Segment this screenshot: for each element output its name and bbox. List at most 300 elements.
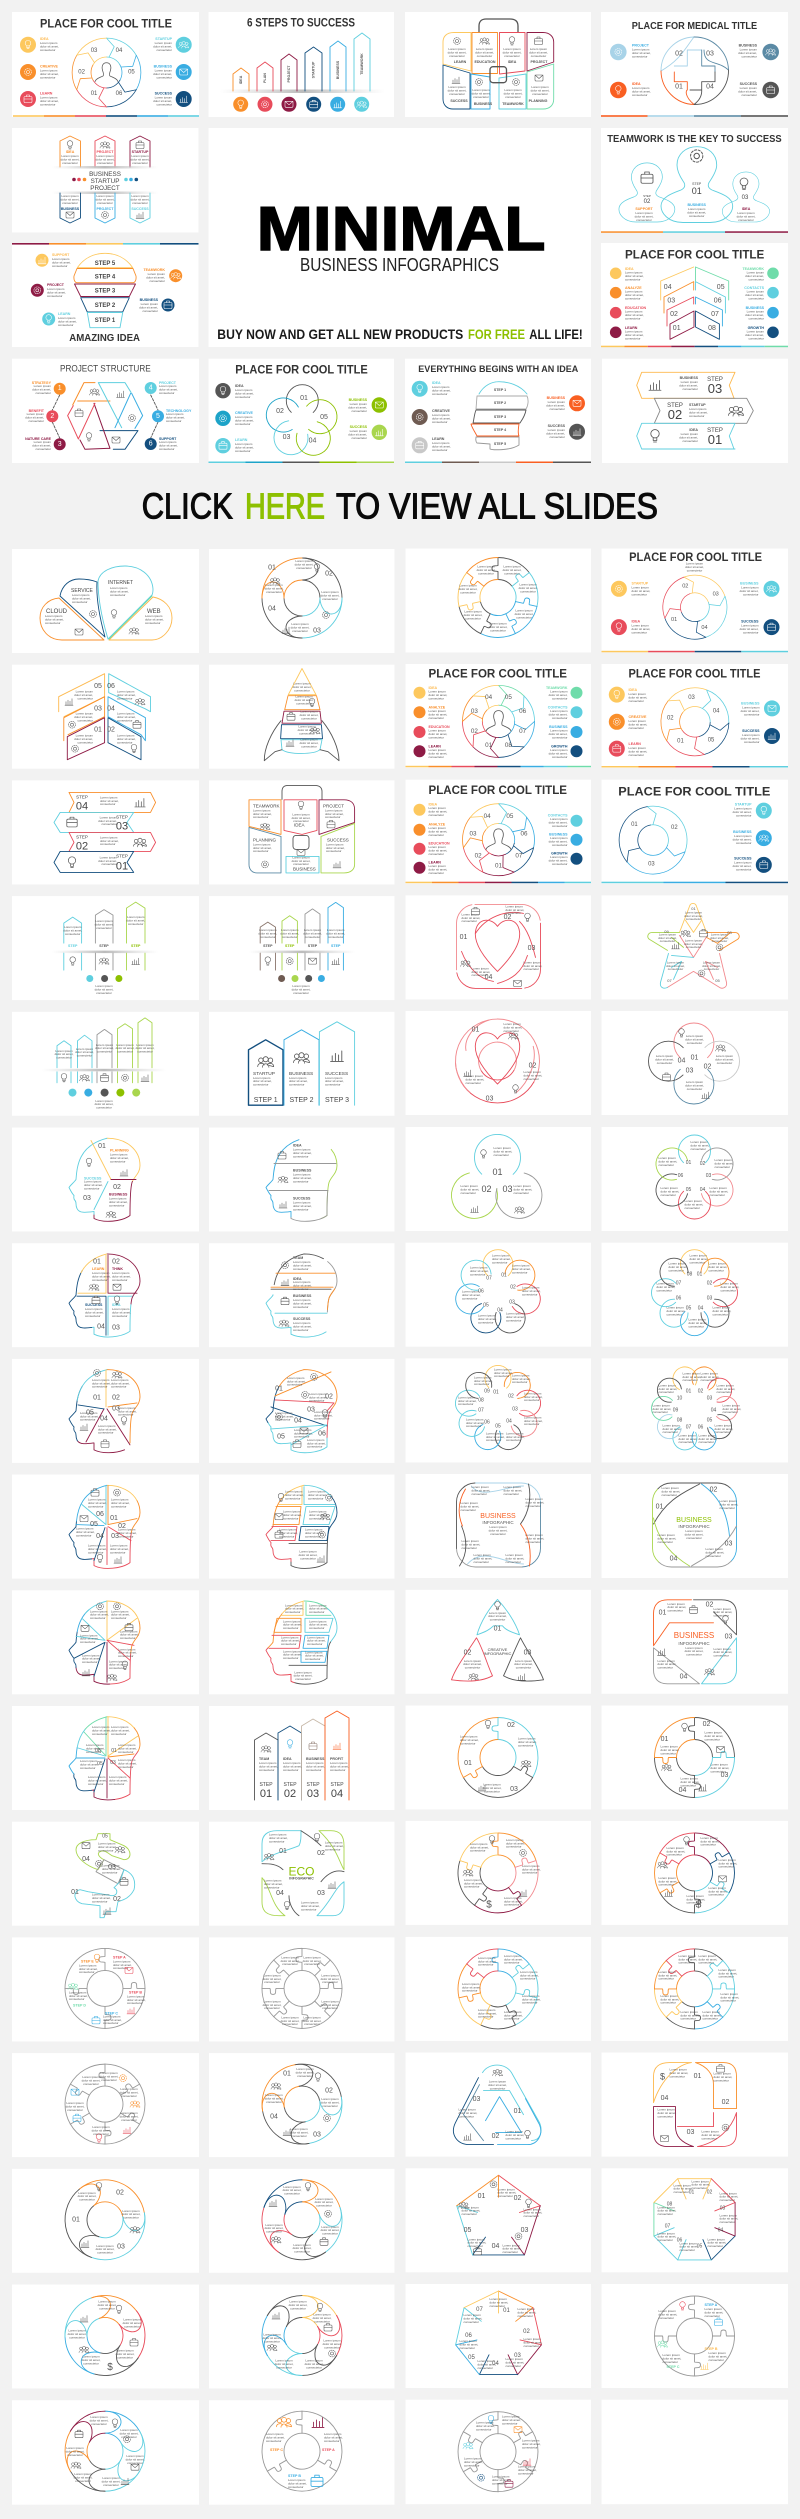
slide: place for cool title, eight part ring with person: 01 (485, 742, 493, 749)
slide: place for cool title, chevrons (601, 243, 788, 347)
ring chart with person (62, 30, 151, 115)
slide: four houses: IDEA (283, 1757, 292, 1761)
heading: click here to view all slides: TO VIEW ALL SLIDES (336, 486, 658, 526)
chevron stack: 07 (711, 311, 719, 318)
slide: briefcase infographic: PLANNING (529, 99, 548, 103)
slide: seven circles: 06 (478, 1289, 484, 1295)
slide: briefcase infographic: LEARN (454, 60, 467, 64)
numbered nodes: 2 (50, 413, 54, 420)
arrow bars: TEAMWORK (360, 53, 364, 75)
three people outlines: BUSINESS (688, 203, 706, 207)
slide: rounded square business infographic: INFOGRAPHIC (678, 1524, 710, 1529)
slide: place for cool title, five part ring: 03 (688, 695, 695, 701)
slide: nine circles: 06 (484, 1419, 490, 1425)
icons and side labels: IDEA (432, 381, 441, 385)
chevron stack: 05 (717, 284, 725, 291)
slide: head with eight wedges (12, 1706, 199, 1810)
slide: nine circles (406, 1358, 591, 1462)
slide: place for cool title, five part ring: IDEA (628, 688, 637, 692)
slide: five part swirl ring (209, 2169, 394, 2274)
numbered nodes: PROJECT (159, 381, 177, 385)
slide: nine circles: 02 (508, 1393, 514, 1399)
heading: PLACE FOR MEDICAL TITLE (632, 20, 757, 32)
chevron stack: 02 (670, 311, 678, 318)
slide: numeral ring, four steps: STEP E (81, 1959, 94, 1963)
bulb steps: STEP 5 (95, 261, 116, 267)
slide: place for cool title, five part ring: 04 (713, 709, 720, 715)
arrow bars: IDEA (239, 75, 243, 84)
slide: rounded square business infographic, four parts: 02 (706, 1601, 713, 1608)
slide: eight circles: 04 (698, 1306, 703, 1312)
slide: head with six wedges: 02 (118, 1523, 126, 1530)
icons and side labels: CREATIVE (40, 64, 59, 68)
slide: six part briefcase: TEAMWORK (253, 803, 280, 808)
slide: place for cool title, eight part ring with person: LEARN (428, 744, 441, 748)
slide: three circles: 01 (492, 1167, 503, 1177)
icons and side labels: CONTACTS (744, 286, 765, 290)
slide: head with three wedges: 02 (113, 1184, 121, 1191)
upper tags: STARTUP (132, 150, 149, 154)
slide: three blade triangle: 02 (464, 1649, 471, 1656)
slide: cloud with four parts (12, 549, 199, 653)
slide: three step ribbons: BUSINESS (680, 376, 699, 380)
ring chart with person: 05 (128, 70, 135, 75)
slide: place for cool title, five circles (208, 359, 394, 471)
slide: place for cool title, four part ring: 04 (701, 625, 708, 631)
slide: head with six cuts (209, 1359, 394, 1463)
slide: head with six cuts: 02 (325, 1393, 333, 1400)
three people outlines: IDEA (742, 207, 751, 211)
slide: place for cool title, three part ring: STARTUP (735, 803, 752, 807)
chevron stack: 08 (708, 325, 716, 332)
icons and side labels (215, 383, 387, 453)
slide: four part swirl ring, large text: 03 (313, 2132, 321, 2139)
slide: three blade triangle: 03 (524, 1649, 531, 1656)
icons and side labels: LEARN (235, 438, 248, 442)
slide: three houses: STARTUP (253, 1071, 275, 1077)
slide: heart ring (406, 1011, 591, 1118)
ring chart with person: 02 (78, 70, 86, 75)
slide: rounded square, four quarter arcs: 02 (722, 2099, 729, 2106)
slide: six chevron houses: 06 (107, 683, 115, 690)
bulb steps (74, 253, 136, 328)
slide: octagon, eight parts: 02 (707, 2189, 712, 2195)
slide: pentagon, five parts: 01 (478, 2193, 485, 2200)
slide: head with four layers: BUSINESS (293, 1294, 312, 1298)
slide: rounded square business infographic, four parts (602, 1590, 788, 1694)
heading: PLACE FOR COOL TITLE (235, 365, 368, 377)
slide: three step ribbons: 03 (708, 381, 722, 396)
slide: star: 01 (691, 906, 696, 911)
slide: six chevron houses: 02 (107, 727, 115, 734)
slide: six part briefcase (209, 780, 394, 884)
slide: head in four quadrants (12, 1243, 199, 1347)
slide: rounded square, four quarter arcs: 04 (661, 2095, 668, 2102)
slide: rounded square, four quarter arcs: $ (660, 2072, 665, 2082)
slide: three step arrows: STEP (68, 944, 78, 948)
slide: octagon, eight parts (602, 2168, 788, 2272)
slide: three step arrows: STEP (131, 944, 141, 948)
overlapping circles: 05 (320, 414, 328, 421)
slide: rounded square, four quarter arcs: 03 (687, 2129, 694, 2136)
slide: six circles: 03 (706, 1173, 711, 1179)
slide: ten circles: 03 (707, 1395, 712, 1401)
slide: octagon, eight parts: 07 (665, 2223, 670, 2229)
chevron stack: 04 (664, 284, 672, 291)
slide: head with three wedges: 01 (98, 1143, 106, 1150)
slide: four houses: TEAM (259, 1757, 269, 1761)
slide: six part briefcase: SUCCESS (327, 837, 349, 842)
subtitle: BUSINESS INFOGRAPHICS (300, 255, 499, 275)
slide: business startup project (12, 128, 198, 232)
ring chart with person: 03 (91, 48, 98, 54)
lower tags (60, 193, 150, 223)
slide: three houses: BUSINESS (289, 1071, 313, 1077)
slide: eight circles (602, 1243, 788, 1347)
slide: nine circles: 09 (484, 1388, 490, 1394)
slide: six chevron houses: 03 (94, 706, 102, 713)
icons and side labels: PROJECT (632, 44, 650, 48)
slide: place for cool title, seven part ring: 01 (495, 862, 502, 869)
slide: heptagon, seven parts: 07 (476, 2307, 483, 2313)
slide: three blade triangle: CREATIVE (488, 1647, 508, 1652)
slide: four houses (209, 1706, 394, 1810)
slide: eight circles: 02 (707, 1281, 712, 1287)
slide: rounded square business infographic: 02 (710, 1486, 717, 1494)
slide: place for cool title, four part ring: 01 (671, 617, 677, 623)
slide: five part swirl ring, colour variant (12, 2284, 199, 2389)
slide: four step ribbons: STEP (116, 853, 128, 858)
slide: teamwork is the key to success (601, 128, 788, 233)
slide: rounded square business infographic with swirls (406, 1474, 591, 1578)
icons and side labels: ANALYZE (625, 286, 642, 290)
numbered nodes: 6 (149, 440, 153, 448)
slide: head with five wedges (12, 1359, 199, 1463)
slide: four houses: STEP (330, 1782, 344, 1788)
slide: pentagon, five parts: 02 (514, 2195, 521, 2202)
icons and side labels: SUCCESS (350, 425, 368, 429)
slide: dollar sign puzzle: 03 (108, 1864, 116, 1871)
slide: place for cool title, three part ring: BUSINESS (733, 830, 752, 834)
icons and side labels: BUSINESS (746, 306, 765, 310)
slide: numeral ring, four steps: STEP A (113, 1955, 126, 1959)
slide: heptagon, seven parts (406, 2284, 591, 2388)
slide: rounded triangle, three parts: 02 (492, 2133, 499, 2140)
slide: eight circles: 06 (676, 1296, 681, 1302)
icons and side labels: GROWTH (748, 326, 764, 330)
slide: rocket (209, 665, 394, 769)
overlapping circles: 04 (309, 438, 316, 444)
slide: cloud with four parts: CLOUD (46, 609, 68, 615)
slide: three step ribbons: STARTUP (689, 403, 706, 407)
slide: seven circles: 01 (501, 1273, 507, 1279)
slide: four step arrows: STEP (331, 944, 341, 948)
slide: ten circles: 05 (707, 1417, 712, 1423)
slide: six circles: 04 (700, 1187, 705, 1193)
heading: PLACE FOR COOL TITLE (40, 18, 172, 30)
slide: place for cool title, eight part ring with person: 04 (485, 694, 493, 701)
numbered nodes: BENEFIT (29, 409, 45, 413)
slide: rounded square business infographic, four parts: INFOGRAPHIC (678, 1641, 710, 1646)
slide: four step ribbons: 01 (116, 860, 128, 872)
slide: numeral ring, six steps (12, 2053, 199, 2157)
slide: rounded square business infographic, four parts: BUSINESS (674, 1631, 714, 1640)
slide: place for cool title, six step ring (12, 12, 199, 117)
slide: briefcase infographic: PROJECT (531, 60, 548, 64)
slide: six piece puzzle ring (602, 1821, 788, 1925)
slide: seven circles: 07 (486, 1276, 492, 1282)
slide: four part swirl ring (209, 549, 394, 653)
slide: place for cool title, five part ring: 01 (677, 738, 684, 744)
slide: heptagon, seven parts: 04 (492, 2361, 499, 2367)
numbered nodes (25, 381, 192, 451)
icons and side labels: LEARN (432, 437, 445, 441)
numbered nodes: NATURE CARE (25, 437, 52, 441)
heading: EVERYTHING BEGINS WITH AN IDEA (418, 364, 578, 375)
slide: four step arrows: STEP (285, 944, 295, 948)
slide: head with six cuts: 03 (307, 1406, 315, 1413)
slide: four circles: 02 (704, 1064, 711, 1070)
slide: dollar sign puzzle: 05 (102, 1834, 108, 1840)
slide: five piece puzzle ring: $ (486, 1899, 492, 1910)
slide: head with four layers: SUCCESS (293, 1317, 311, 1321)
slide: numeral ring, eight steps (209, 1937, 394, 2041)
slide: briefcase infographic (405, 12, 591, 117)
slide: rounded square business infographic, four parts: 04 (680, 1673, 687, 1680)
circle with medical cross: 02 (675, 50, 683, 58)
icons and side labels: SUCCESS (155, 92, 173, 96)
slide: rounded square business infographic, four parts: 01 (659, 1609, 666, 1616)
icons and side labels (31, 253, 182, 327)
slide: place for cool title, eight part ring with person: ANALYZE (428, 706, 446, 710)
slide: place for cool title, three part ring (602, 780, 788, 884)
colour strip (601, 231, 788, 233)
slide: rounded triangle, three parts: 03 (473, 2096, 480, 2103)
three people outlines: 02 (644, 199, 651, 205)
arrow bars: PLAN (263, 73, 267, 83)
slide: briefcase infographic: EDUCATION (474, 60, 496, 64)
slide: head with four layers (209, 1243, 394, 1347)
icons and side labels: IDEA (632, 82, 641, 86)
slide: briefcase infographic: SUCCESS (450, 99, 468, 103)
colour strip (601, 115, 788, 117)
slide: rounded square with heart: 03 (528, 945, 535, 952)
slide: four step ribbons: 04 (76, 800, 88, 812)
slide: pentagon, five parts: 04 (492, 2243, 499, 2250)
slide: pentagon, five parts: 03 (521, 2227, 528, 2234)
slide: star: 05 (715, 978, 720, 983)
slide: three houses (209, 1012, 394, 1116)
slide: place for cool title, seven part ring: 02 (475, 852, 482, 859)
icons and side labels: CREATIVE (235, 411, 254, 415)
slide: four part swirl ring: 04 (268, 606, 276, 612)
slide: four circles: 04 (678, 1058, 685, 1064)
slide: place for cool title, eight part ring with person: BUSINESS (549, 725, 568, 729)
heading: TEAMWORK IS THE KEY TO SUCCESS (607, 133, 782, 145)
chevron stack (661, 267, 729, 339)
slide: rounded triangle, three parts (406, 2053, 591, 2157)
slide: three piece puzzle ring: 03 (510, 1786, 518, 1793)
slide: three part swirl ring: 01 (72, 2216, 80, 2223)
slide: three piece puzzle ring: 01 (464, 1760, 472, 1767)
slide: four piece puzzle ring: 02 (703, 1721, 710, 1728)
chevron stack: 03 (667, 298, 675, 304)
slide: dollar sign puzzle (12, 1822, 199, 1926)
numbered nodes: 5 (156, 413, 160, 420)
slide: five piece puzzle ring (406, 1821, 591, 1928)
hexagon blades (68, 383, 143, 449)
slide: three blade triangle: INFOGRAPHIC (484, 1651, 512, 1656)
slide: three step ribbons: 01 (708, 432, 722, 447)
slide: 6 steps to success (208, 12, 394, 117)
icons and side labels (610, 267, 779, 340)
three people outlines: STEP (643, 194, 651, 198)
slide: place for cool title, eight part ring with person: EDUCATION (428, 725, 450, 729)
slide: rounded square business infographic: BUSINESS (676, 1517, 712, 1524)
slide: six chevron houses: 05 (94, 683, 102, 690)
slide: head with four layers: TEAM (293, 1256, 303, 1260)
slide: head in four quadrants: SUCCESS (85, 1303, 103, 1307)
slide: cloud with four parts: WEB (147, 609, 161, 615)
slide: four step ribbons: 03 (116, 820, 128, 832)
slide: place for cool title, three part ring: SUCCESS (734, 857, 752, 861)
slide: four part swirl ring: 01 (268, 564, 276, 572)
slide: six chevron houses: 04 (107, 706, 115, 713)
layered head: STEP 5 (494, 442, 506, 446)
overlapping circles: 02 (276, 408, 284, 415)
slide: place for cool title, seven part ring: 07 (515, 852, 523, 859)
slide: place for cool title, three part ring: 01 (631, 822, 638, 828)
slide: four circles: 01 (691, 1054, 698, 1062)
hexagon icons (75, 389, 135, 443)
three people outlines: 01 (692, 186, 702, 196)
slide: place for cool title, eight part ring with person: GROWTH (551, 744, 568, 748)
slide: five part swirl ring, colour variant: $ (107, 2362, 113, 2373)
slide: numeral ring, three steps (209, 2400, 394, 2506)
upper tags (60, 136, 150, 167)
slide: three step ribbons: STEP (667, 403, 683, 409)
slide: head with three wedges: 03 (83, 1195, 91, 1202)
slide: three part swirl ring: 03 (117, 2243, 125, 2250)
slide: blank placeholder (602, 2400, 788, 2504)
slide: six part swirl ring, colour variant (12, 2400, 199, 2505)
slide: head with five wedges: 05 (86, 1409, 94, 1416)
slide: place for cool title, eight part ring with person: IDEA (428, 686, 437, 690)
numbered nodes: 3 (58, 441, 62, 448)
slide: head in four quadrants: 04 (97, 1324, 105, 1331)
slide: place for cool title, five part ring (602, 664, 788, 768)
slide: three step ribbons: STEP (707, 377, 723, 383)
bulb steps: STEP 2 (95, 303, 116, 309)
lower tags: PROJECT (97, 207, 114, 211)
icons and side labels: TEAMWORK (742, 267, 764, 271)
slide: place for cool title, five part ring: PLACE FOR COOL TITLE (628, 668, 761, 680)
slide: place for cool title, five part ring: 02 (667, 715, 674, 721)
slide: place for cool title, seven part ring: CONTACTS (548, 814, 568, 818)
slide: briefcase infographic: BUSINESS (474, 102, 493, 106)
slide: six circles: 02 (700, 1161, 705, 1167)
slide: head with three layers (209, 1128, 394, 1232)
slide: four step ribbons: STEP (76, 834, 88, 839)
slide: six part swirl ring (209, 2284, 394, 2388)
slide: ten circles: 04 (711, 1407, 716, 1413)
slide: place for cool title, eight part ring with person: TEAMWORK (546, 686, 568, 690)
slide: head with six wedges: 01 (110, 1515, 118, 1522)
slide: four houses: PROFIT (330, 1757, 344, 1761)
slide: place for cool title, eight part ring with person: 03 (471, 708, 478, 715)
slide: head with five wedges: 03 (112, 1405, 120, 1412)
heading: click here to view all slides (142, 486, 658, 526)
ring chart with person: 04 (116, 48, 123, 54)
slide: ten circles: 06 (698, 1424, 703, 1430)
slide: cloud with four parts: INTERNET (108, 580, 133, 586)
slide: rounded square business infographic with swirls: BUSINESS (480, 1513, 516, 1520)
slide: head in four quadrants: 01 (93, 1259, 101, 1266)
slide: briefcase infographic: TEAMWORK (502, 102, 524, 106)
colour strip (13, 115, 199, 117)
slide: four step arrows (209, 896, 394, 1000)
slide: place for cool title, seven part ring: PLACE FOR COOL TITLE (428, 785, 567, 797)
slide: numeral ring, four steps: STEP D (73, 2003, 86, 2007)
slide: numeral ring, four steps: STEP B (129, 1990, 142, 1994)
offer line: ALL LIFE! (529, 327, 583, 342)
slide: place for cool title, eight part ring with person: PLACE FOR COOL TITLE (428, 668, 567, 680)
slide: numeral ring, grey with four steps: STEP C (666, 2365, 680, 2369)
heading: PLACE FOR COOL TITLE (625, 249, 765, 261)
slide: rounded square business infographic with swirls: INFOGRAPHIC (482, 1520, 514, 1525)
slide: head with eight wedges: 01 (111, 1748, 117, 1754)
slide: rounded square business infographic, four parts: 03 (725, 1633, 732, 1640)
slide: pentagon, five parts: 05 (464, 2227, 471, 2234)
slide: place for medical title (601, 12, 788, 117)
slide: seven circles: 04 (497, 1308, 503, 1314)
offer line: FOR FREE (468, 327, 525, 342)
three people outlines: SUPPORT (635, 207, 653, 211)
slide: place for cool title, four part ring: 03 (713, 591, 719, 597)
slide: six circles: 06 (678, 1173, 683, 1179)
slide: head with six cuts: 01 (275, 1385, 283, 1392)
heading: AMAZING IDEA (69, 332, 140, 344)
slide: place for cool title, five part ring: 05 (708, 738, 715, 743)
slide: numeral ring, four steps (12, 1937, 199, 2041)
slide: numeral ring, grey with four steps: STEP B (704, 2347, 718, 2351)
slide: four part swirl ring, large text: 01 (283, 2071, 291, 2078)
slide: eco infographic square: 03 (317, 1890, 325, 1897)
slide: head with five wedges: 02 (112, 1394, 120, 1401)
slide: place for cool title, seven part ring: BUSINESS (549, 833, 568, 837)
numbered nodes: 4 (149, 384, 153, 392)
slide: numeral ring, three steps: STEP B (288, 2474, 301, 2478)
slide: dollar sign puzzle: 04 (82, 1856, 90, 1863)
slide: three step arrows: STEP (99, 944, 109, 948)
slide: place for cool title, four part ring: 02 (682, 583, 688, 589)
icons and side labels: LEARN (40, 92, 53, 96)
slide: four piece puzzle ring: 03 (721, 1772, 728, 1779)
slide: place for cool title, eight part ring with person: 07 (519, 728, 527, 735)
slide: head with five wedges: 01 (93, 1394, 101, 1401)
slide: three step arrows (12, 896, 199, 1000)
ring chart with person: 01 (91, 91, 98, 97)
slide: eco infographic square: 04 (276, 1890, 284, 1897)
slide: place for cool title, eight part ring with person: CONTACTS (548, 706, 568, 710)
slide: seven circles (406, 1243, 591, 1347)
slide: four part swirl ring, large text (209, 2053, 394, 2157)
heading: click here to view all slides: CLICK (142, 486, 233, 526)
three people outlines: STEP (692, 182, 702, 186)
icons and side labels (610, 44, 779, 98)
slide: heart ring: 02 (529, 1062, 536, 1070)
circle with medical cross: 01 (675, 84, 683, 90)
